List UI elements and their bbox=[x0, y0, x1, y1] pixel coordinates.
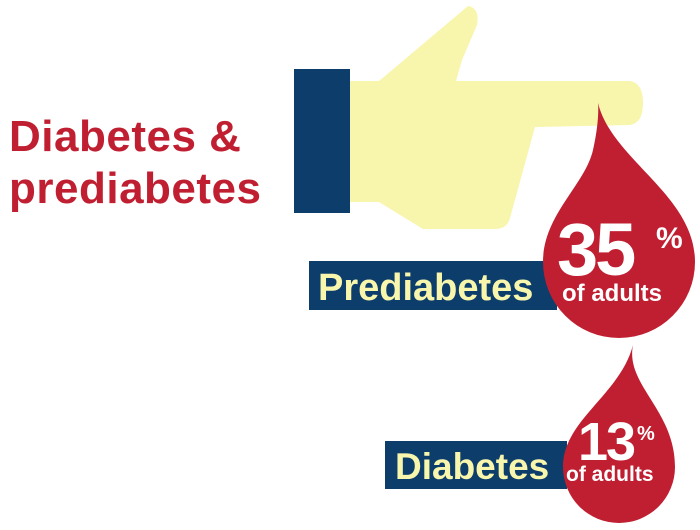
title: Diabetes & bbox=[9, 112, 241, 161]
drop: 35%: % bbox=[656, 222, 683, 255]
drop: 13%: % bbox=[637, 423, 655, 445]
label box: prediabetes: Prediabetes bbox=[318, 267, 533, 309]
drop: 13%: 13 bbox=[578, 412, 635, 472]
drop: 13% bbox=[563, 345, 675, 523]
title bbox=[9, 112, 261, 213]
title: prediabetes bbox=[9, 164, 261, 213]
drop: 13%: of adults bbox=[566, 463, 654, 486]
drop: 35%: of adults bbox=[562, 280, 662, 307]
label box: diabetes: Diabetes bbox=[395, 446, 549, 487]
icon: pointing hand bbox=[294, 6, 643, 229]
drop: 35% bbox=[543, 103, 695, 338]
drop: 35%: 35 bbox=[557, 208, 635, 291]
